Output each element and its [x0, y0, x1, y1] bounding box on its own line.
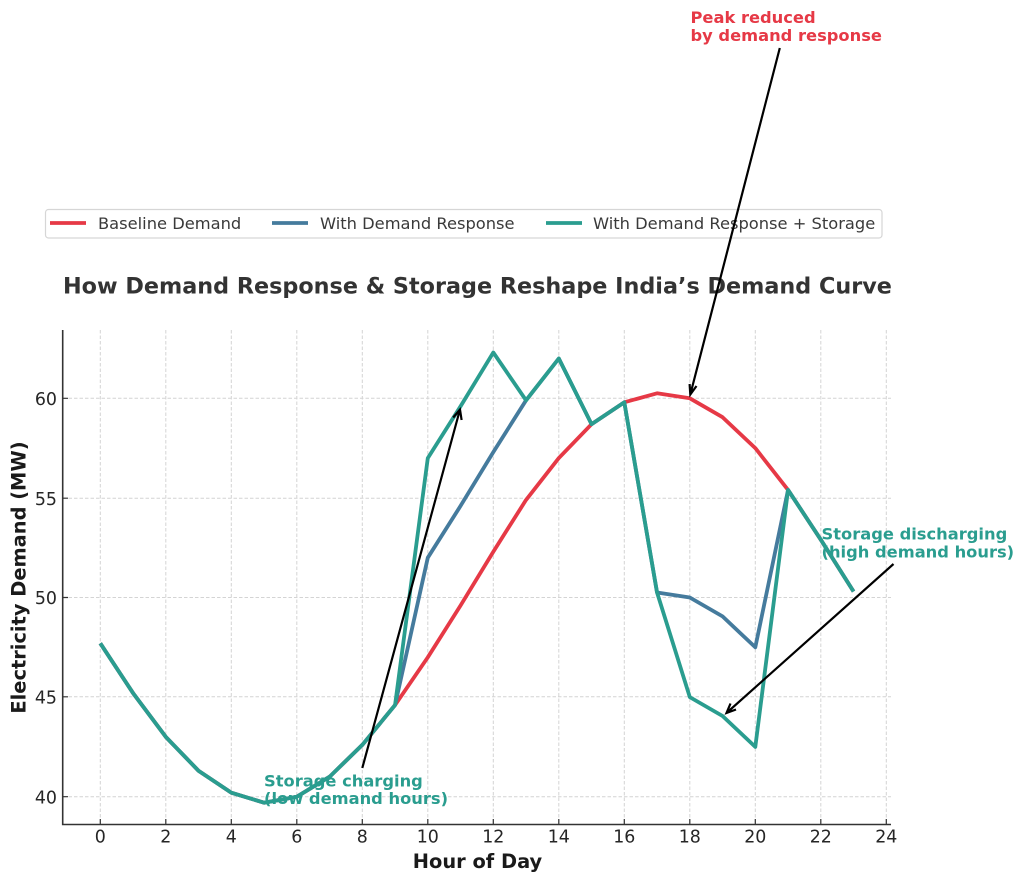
annotation: storage charging: (low demand hours) — [264, 789, 448, 808]
line: with demand response — [100, 358, 854, 803]
axes — [63, 330, 891, 824]
y axis label: Electricity Demand (MW) — [8, 441, 30, 714]
x axis tick labels: 14 — [548, 828, 570, 848]
y axis tick labels: 40 — [35, 788, 57, 808]
annotation: storage discharging: Storage discharging — [822, 524, 1007, 543]
annotation: peak reduced — [690, 8, 882, 394]
x axis tick labels: 18 — [679, 828, 701, 848]
y axis tick labels: 60 — [35, 390, 57, 410]
x axis tick labels: 16 — [613, 828, 635, 848]
x axis tick labels: 0 — [95, 828, 106, 848]
x axis tick labels: 8 — [357, 828, 368, 848]
x axis tick labels: 24 — [875, 828, 897, 848]
annotation: storage discharging: (high demand hours) — [822, 542, 1014, 561]
x axis tick labels — [95, 828, 897, 848]
y axis tick labels — [35, 390, 57, 808]
y axis tick labels: 50 — [35, 589, 57, 609]
annotation: peak reduced: by demand response — [690, 26, 882, 45]
title: How Demand Response & Storage Reshape India’s Demand Curve — [63, 274, 892, 300]
legend: With Demand Response — [320, 214, 515, 233]
line: baseline demand — [100, 393, 854, 803]
x axis label: Hour of Day — [413, 850, 543, 873]
x axis tick labels: 2 — [160, 828, 171, 848]
x axis tick labels: 22 — [810, 828, 832, 848]
y axis tick labels: 45 — [35, 688, 57, 708]
legend: Baseline Demand — [98, 214, 241, 233]
x axis tick labels: 12 — [482, 828, 504, 848]
line: with demand response + storage — [100, 352, 854, 803]
x axis tick labels: 6 — [291, 828, 302, 848]
y axis tick labels: 55 — [35, 490, 57, 510]
annotation: storage discharging — [726, 524, 1014, 713]
legend — [46, 210, 882, 238]
x axis tick labels: 4 — [226, 828, 237, 848]
annotation: storage charging — [264, 410, 462, 808]
annotation: peak reduced: Peak reduced — [690, 8, 816, 27]
x axis tick labels: 10 — [417, 828, 439, 848]
legend: With Demand Response + Storage — [593, 214, 875, 233]
annotation: storage charging: Storage charging — [264, 771, 423, 790]
x axis tick labels: 20 — [744, 828, 766, 848]
